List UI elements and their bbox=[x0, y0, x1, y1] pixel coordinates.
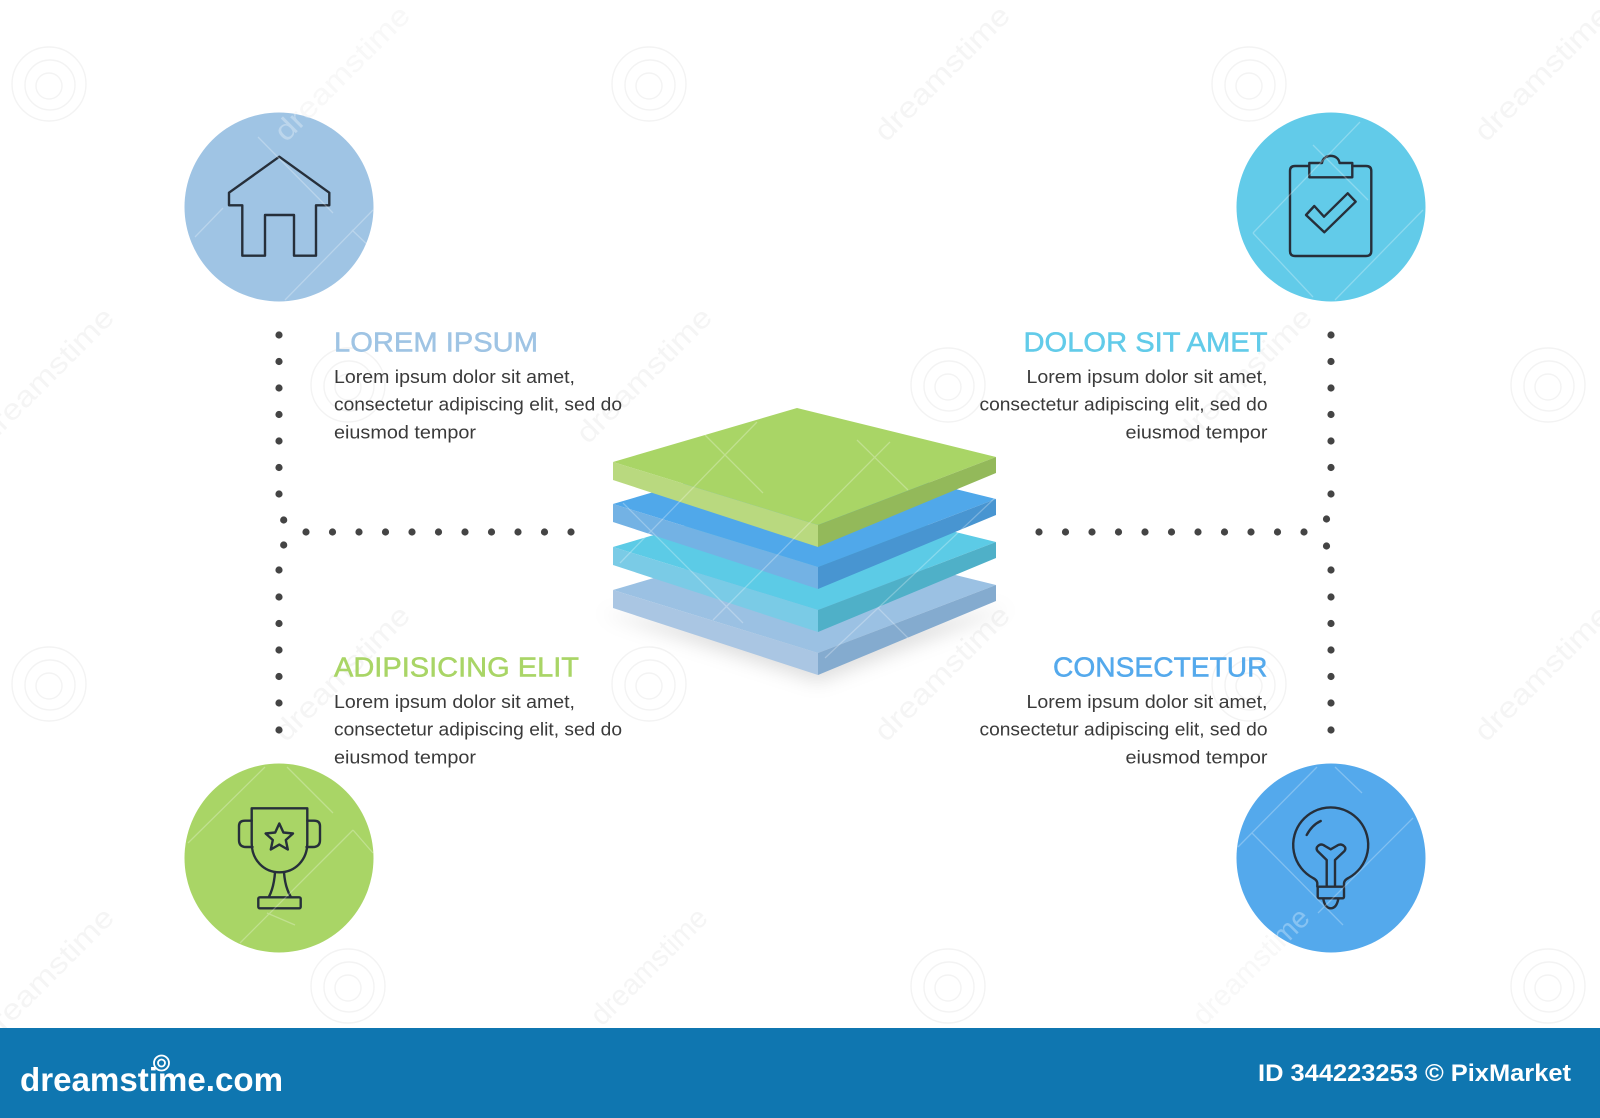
dotted connector: right bbox=[1035, 331, 1335, 734]
icon: clipboard with check bbox=[1290, 156, 1371, 256]
heading: CONSECTETUR bbox=[1053, 652, 1268, 683]
body text: Lorem ipsum dolor sit amet, bbox=[1026, 691, 1268, 712]
icon: light bulb bbox=[1293, 807, 1368, 908]
text block: dolor sit amet bbox=[980, 327, 1268, 442]
logo spiral bbox=[154, 1056, 169, 1070]
image id credit: ID 344223253 © PixMarket bbox=[1258, 1060, 1571, 1087]
icon: house bbox=[229, 157, 329, 256]
layer 3: cyan bbox=[613, 493, 996, 632]
circle: idea bbox=[1236, 764, 1426, 952]
layer 4: light blue bbox=[613, 536, 996, 675]
body text bbox=[980, 366, 1268, 442]
watermark lines over shapes bbox=[188, 122, 1423, 943]
watermark text over circles: dreamstime bbox=[268, 0, 417, 148]
text block: lorem ipsum bbox=[334, 327, 622, 442]
body text: Lorem ipsum dolor sit amet, bbox=[334, 366, 575, 387]
dotted connector: left bbox=[275, 331, 575, 734]
body text: consectetur adipiscing elit, sed do bbox=[334, 719, 622, 740]
watermark pattern: dreamstime bbox=[868, 0, 1017, 148]
stack shadow bbox=[600, 608, 1010, 682]
watermark pattern: dreamstime bbox=[868, 599, 1017, 748]
body text: consectetur adipiscing elit, sed do bbox=[980, 394, 1268, 415]
layer 1: green bbox=[613, 408, 996, 547]
heading: ADIPISICING ELIT bbox=[334, 652, 579, 683]
watermark pattern: dreamstime bbox=[1186, 902, 1316, 1032]
body text: consectetur adipiscing elit, sed do bbox=[334, 394, 622, 415]
layer 2: blue bbox=[613, 450, 996, 589]
circle: clipboard bbox=[1236, 112, 1426, 302]
body text: eiusmod tempor bbox=[1126, 421, 1268, 442]
body text bbox=[980, 691, 1268, 767]
icon: trophy bbox=[239, 808, 320, 908]
circle: home bbox=[184, 112, 374, 302]
watermark pattern: dreamstime bbox=[268, 0, 417, 148]
body text bbox=[334, 366, 622, 442]
watermark pattern: dreamstime bbox=[268, 599, 417, 748]
watermark text over circles bbox=[268, 0, 1316, 1032]
layered stack graphic bbox=[600, 408, 1010, 682]
text block: consectetur bbox=[980, 652, 1268, 767]
watermark pattern: dreamstime bbox=[570, 301, 719, 450]
footer logo text: dreamstime.com bbox=[20, 1061, 283, 1098]
watermark pattern: dreamstime bbox=[1170, 301, 1319, 450]
body text: eiusmod tempor bbox=[1126, 746, 1268, 767]
body text: Lorem ipsum dolor sit amet, bbox=[1026, 366, 1268, 387]
watermark text over circles: dreamstime bbox=[1186, 902, 1316, 1032]
watermark pattern: dreamstime bbox=[1468, 0, 1600, 148]
text block: adipisicing elit bbox=[334, 652, 622, 767]
circle: trophy bbox=[184, 764, 374, 952]
heading: DOLOR SIT AMET bbox=[1024, 327, 1268, 358]
body text bbox=[334, 691, 622, 767]
body text: eiusmod tempor bbox=[334, 746, 476, 767]
body text: eiusmod tempor bbox=[334, 421, 476, 442]
heading: LOREM IPSUM bbox=[334, 327, 538, 358]
watermark pattern: dreamstime bbox=[584, 902, 714, 1032]
body text: consectetur adipiscing elit, sed do bbox=[980, 719, 1268, 740]
footer bar bbox=[0, 1028, 1600, 1118]
watermark pattern: dreamstime bbox=[1468, 599, 1600, 748]
body text: Lorem ipsum dolor sit amet, bbox=[334, 691, 575, 712]
